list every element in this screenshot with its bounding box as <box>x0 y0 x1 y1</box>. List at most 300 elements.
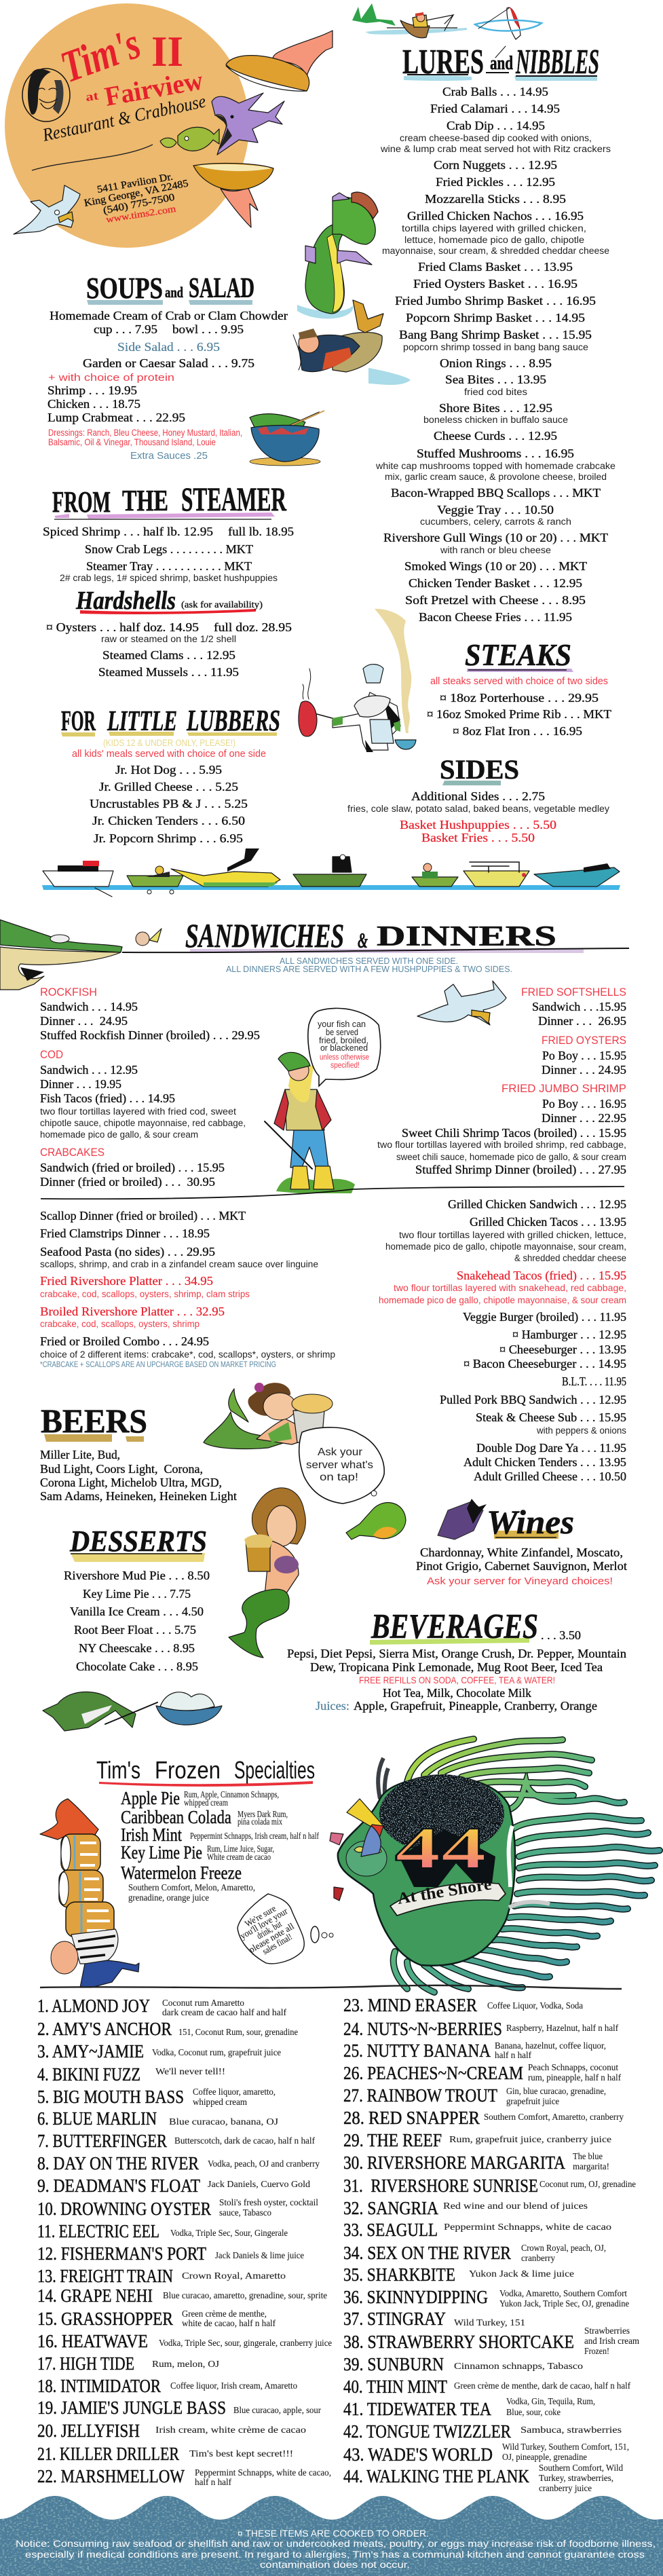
illustration: bearded fisherman <box>265 1052 355 1193</box>
panel: frozen specialties: whipped cream <box>184 1797 228 1808</box>
panel: soups and salad items: Chicken . . . 18.75 <box>48 397 140 411</box>
logo wordmark: Restaurant & Crabhouse <box>40 91 208 145</box>
panel: lures and nibbles items: Onion Rings . . . 8.95 <box>440 356 552 370</box>
heading: Beverages: . . . 3.50 <box>541 1628 581 1642</box>
callout: fish cooking bubble: be served <box>326 1028 358 1037</box>
panel: drink list right column: 43. WADE'S WORLD <box>343 2444 493 2465</box>
panel: drink list left column: Stoli's fresh oyster, cocktail <box>219 2197 318 2207</box>
panel: drink list right column: half n half <box>495 2050 531 2060</box>
callout: fish cooking bubble: or blackened <box>320 1043 368 1053</box>
address text <box>83 172 189 225</box>
heading: For Little Lubbers: LITTLE <box>107 706 177 737</box>
panel: desserts list <box>64 1569 210 1673</box>
panel: frozen specialties: Apple Pie <box>121 1788 180 1808</box>
panel: left seafood platters: crabcake, cod, scallops, oysters, shrimp <box>40 1319 200 1329</box>
icon: grapes <box>438 1499 487 1539</box>
address text: (540) 775-7500 <box>102 192 176 217</box>
icon: crown <box>347 1799 383 1826</box>
panel: frozen specialties: grenadine, orange juice <box>128 1892 209 1903</box>
panel: right sandwiches and tacos: Grilled Chicken Sandwich . . . 12.95 <box>448 1197 626 1211</box>
panel: steamer items <box>43 525 294 583</box>
panel: drink list left column: Jack Daniels & lime juice <box>215 2250 304 2260</box>
icon: dragon head <box>338 1777 515 1966</box>
panel: soups and salad items: Balsamic, Oil & Vinegar, Thousand Island, Louie <box>48 437 216 447</box>
panel: left fish dinners: CRABCAKES <box>40 1146 105 1159</box>
panel: right sandwiches and tacos: Snakehead Tacos (fried) . . . 15.95 <box>457 1269 626 1283</box>
panel: soups and salad items: Lump Crabmeat . . . 22.95 <box>48 411 185 424</box>
panel: steamer items: full lb. 18.95 <box>228 525 294 538</box>
panel: right fried dinners: Po Boy . . . 15.95 <box>542 1049 626 1062</box>
panel: left seafood platters: Broiled Rivershore Platter . . . 32.95 <box>40 1305 225 1318</box>
panel: drink list right column: Sambuca, strawberries <box>520 2425 622 2435</box>
panel: lures and nibbles items: fried cod bites <box>464 387 527 397</box>
panel: lures and nibbles items: Chicken Tender Basket . . . 12.95 <box>409 576 582 590</box>
panel: lures and nibbles items: mayonnaise, sour cream, & shredded cheddar cheese <box>382 246 609 256</box>
illustration: reclining mermaid with mug <box>204 1383 333 1449</box>
icon: hand and bottom bun <box>193 164 273 227</box>
heading: Sandwiches and Dinners: DINNERS <box>377 921 556 952</box>
panel: drink list right column: Green crème de menthe, dark de cacao, half n half <box>454 2381 630 2391</box>
panel: left seafood platters: *CRABCAKE + SCALLOPS ARE AN UPCHARGE BASED ON MARKET PRICING <box>40 1360 276 1369</box>
panel: frozen specialties: White cream de cacao <box>207 1852 271 1862</box>
panel: left fish dinners: homemade pico de gallo, & sour cream <box>40 1130 198 1140</box>
icon: fly with face <box>136 929 162 946</box>
panel: frozen specialties: pina colada mix <box>238 1816 282 1827</box>
heading: Hardshells: Hardshells <box>75 586 176 615</box>
address text: www.tims2.com <box>105 204 176 225</box>
panel: drink list left column: Jack Daniels, Cuervo Gold <box>208 2179 310 2189</box>
panel: right sandwiches and tacos: & shredded cheddar cheese <box>514 1253 626 1263</box>
panel: drink list right column: 32. SANGRIA <box>343 2198 438 2218</box>
panel: soups and salad items: Garden or Caesar Salad . . . 9.75 <box>83 356 254 370</box>
heading: Sides: SIDES <box>440 754 519 785</box>
panel: right sandwiches and tacos: Double Dog Dare Ya . . . 11.95 <box>476 1441 626 1455</box>
panel: left fish dinners: Dinner . . . 24.95 <box>40 1014 128 1028</box>
panel: right fried dinners: Dinner . . . 22.95 <box>542 1111 626 1125</box>
panel: right sandwiches and tacos: Grilled Chicken Tacos . . . 13.95 <box>470 1215 626 1229</box>
callout: sales final bubble: please note all <box>247 1921 296 1955</box>
heading: Wines: Wines <box>487 1503 574 1541</box>
panel: frozen specialties: Southern Comfort, Melon, Amaretto, <box>128 1882 255 1892</box>
panel: drink list right column: Blue, sour, coke <box>506 2407 561 2417</box>
heading: Lures and Nibbles <box>402 43 599 81</box>
panel: drink list right column: cranberry <box>521 2253 555 2263</box>
panel: beers list <box>40 1448 237 1503</box>
panel: sides items: fries, cole slaw, potato salad, baked beans, vegetable medley <box>347 804 609 814</box>
panel: lures and nibbles items: Bang Bang Shrimp Basket . . . 15.95 <box>399 328 592 341</box>
panel: drink list left column: Vodka, Triple Sec, Sour, Gingerale <box>170 2228 288 2238</box>
panel: steak items: ¤ 8oz Flat Iron . . . 16.95 <box>453 724 582 738</box>
panel: drink list right column: Yukon Jack & lime juice <box>469 2269 574 2279</box>
panel: lures and nibbles items: Fried Clams Basket . . . 13.95 <box>418 260 573 274</box>
panel: drink list right column: Yukon Jack, Triple Sec, OJ, grenadine <box>499 2298 629 2309</box>
callout: fish cooking bubble: unless otherwise <box>320 1053 369 1062</box>
panel: little lubbers items: Jr. Chicken Tenders . . . 6.50 <box>92 814 245 827</box>
panel: little lubbers items: Jr. Hot Dog . . . 5.95 <box>115 763 222 777</box>
panel: lures and nibbles items: Corn Nuggets . . . 12.95 <box>434 158 557 172</box>
panel: lures and nibbles items: Fried Calamari . . . 14.95 <box>430 102 560 115</box>
panel: left fish dinners: Stuffed Rockfish Dinner (broiled) . . . 29.95 <box>40 1028 260 1043</box>
panel: drink list right column: 44. WALKING THE PLANK <box>343 2466 529 2486</box>
panel: drink list right column: and Irish cream <box>584 2336 639 2346</box>
panel: right fried dinners: Stuffed Shrimp Dinner (broiled) . . . 27.95 <box>415 1163 626 1177</box>
panel: lures and nibbles items: Mozzarella Sticks . . . 8.95 <box>425 192 566 206</box>
panel: lures and nibbles items: white cap mushrooms topped with homemade crabcake <box>375 461 615 471</box>
illustration: boat and bobber top <box>352 3 542 58</box>
panel: lures and nibbles items: Soft Pretzel with Cheese . . . 8.95 <box>405 593 586 607</box>
panel: drink list left column: 1. ALMOND JOY <box>37 1996 150 2016</box>
panel: lures and nibbles items: Bacon-Wrapped BBQ Scallops . . . MKT <box>391 486 601 500</box>
panel: drink list left column: Tim's best kept secret!!! <box>189 2448 293 2459</box>
panel: little lubbers items: Jr. Grilled Cheese . . . 5.25 <box>99 780 238 794</box>
panel: hardshells items: raw or steamed on the 1/2 shell <box>101 634 236 644</box>
panel: frozen specialties: Rum, Lime Juice, Sugar, <box>207 1844 274 1854</box>
panel: lures and nibbles items: popcorn shrimp tossed in bang bang sauce <box>403 342 588 352</box>
panel: right sandwiches and tacos: Steak & Cheese Sub . . . 15.95 <box>476 1411 626 1424</box>
panel: right sandwiches and tacos: Adult Grilled Cheese . . . 10.50 <box>474 1470 626 1483</box>
panel: right fried dinners: Dinner . . . 26.95 <box>538 1014 626 1028</box>
panel: soups and salad items: bowl . . . 9.95 <box>172 322 244 336</box>
panel: drink list right column: Crown Royal, peach, OJ, <box>521 2243 606 2253</box>
panel: drink list right column: Vodka, Amaretto, Southern Comfort <box>499 2288 627 2298</box>
panel: desserts list: Key Lime Pie . . . 7.75 <box>83 1587 191 1601</box>
panel: right sandwiches and tacos: with peppers & onions <box>536 1425 626 1436</box>
heading: Lures and Nibbles: and <box>490 53 513 74</box>
panel: drink list left column: 22. MARSHMELLOW <box>37 2466 185 2486</box>
panel: drink list left column: Blue curacao, amaretto, grenadine, sour, sprite <box>163 2290 327 2300</box>
logo wordmark: II <box>151 27 183 75</box>
panel: lures and nibbles items: Grilled Chicken Nachos . . . 16.95 <box>407 209 584 223</box>
panel: lures and nibbles items: mix, garlic cream sauce, & provolone cheese, broiled <box>385 472 607 482</box>
callout: sales final bubble: drink, but <box>254 1918 284 1941</box>
icon: dessert bowl <box>156 1706 222 1725</box>
panel: drink list left column: Blue curacao, apple, sour <box>233 2405 321 2415</box>
icon: speckled dome <box>379 1774 504 1849</box>
panel: steak items: ¤ 18oz Porterhouse . . . 29.95 <box>440 691 599 705</box>
panel: drink list right column: 25. NUTTY BANANA <box>343 2040 491 2061</box>
panel: frozen specialties: Rum, Apple, Cinnamon Schnapps, <box>184 1789 279 1799</box>
panel: drink list left column: 20. JELLYFISH <box>37 2421 140 2441</box>
panel: drink list right column: Turkey, strawberries, <box>539 2473 613 2483</box>
logo wordmark: Tim's <box>54 18 147 92</box>
panel: sides items: Additional Sides . . . 2.75 <box>411 789 545 803</box>
icon: yellow sport boat <box>171 848 280 886</box>
panel: lures and nibbles items: lettuce, homemade pico de gallo, chipotle <box>404 235 584 245</box>
text: allergy and food safety notice: especially if medical conditions are present. In regard to allergies, Tim's has a communal kitchen and cannot guarantee cross <box>25 2549 645 2560</box>
heading: Beers: BEERS <box>41 1402 147 1440</box>
panel: little lubbers items: all kids' meals served with choice of one side <box>72 749 266 760</box>
panel: beers list: Miller Lite, Bud, <box>40 1448 120 1461</box>
panel: drink list right column: 42. TONGUE TWIZZLER <box>343 2421 511 2442</box>
panel: beers list: Corona Light, Michelob Ultra, MGD, <box>40 1476 222 1489</box>
icon: crab <box>43 1692 136 1731</box>
panel: desserts list: NY Cheescake . . . 8.95 <box>79 1641 195 1655</box>
panel: right sandwiches and tacos: ¤ Bacon Cheeseburger . . . 14.95 <box>463 1357 626 1370</box>
heading: Sandwiches and Dinners <box>122 916 629 954</box>
icon: trees <box>352 3 396 26</box>
panel: lures and nibbles items: boneless chicken in buffalo sauce <box>423 415 568 425</box>
panel: lures and nibbles items: Bacon Cheese Fries . . . 11.95 <box>419 610 572 624</box>
panel: steamer items: Steamer Tray . . . . . . . . . . . MKT <box>86 559 252 573</box>
callout: sales final bubble: you'll love your <box>238 1905 290 1941</box>
icon: fisherman and dog in boat <box>293 300 383 372</box>
panel: left fish dinners: Dinner . . . 19.95 <box>40 1077 121 1091</box>
panel: drink list right column: OJ, pineapple, grenadine <box>502 2452 587 2462</box>
heading: Hardshells <box>75 586 263 615</box>
panel: lures and nibbles items: Smoked Wings (10 or 20) . . . MKT <box>404 559 587 574</box>
panel: drink list left column: Coffee liquor, Irish cream, Amaretto <box>170 2381 297 2391</box>
panel: drink list left column: Irish cream, white crème de cacao <box>155 2425 306 2435</box>
icon: fisherman in rowboat <box>400 12 453 38</box>
panel: lures and nibbles items: Stuffed Mushrooms . . . 16.95 <box>417 447 574 460</box>
panel: drink list left column: We'll never tell!! <box>155 2066 225 2076</box>
panel: drink list left column: white de cacao, half n half <box>182 2318 276 2328</box>
panel: sides items: Basket Hushpuppies . . . 5.50 <box>400 818 556 832</box>
panel: drink list right column: 39. SUNBURN <box>343 2354 444 2374</box>
panel: frozen specialties: Watermelon Freeze <box>121 1863 242 1883</box>
panel: drink list left column: 14. GRAPE NEHI <box>37 2285 153 2306</box>
panel: soups and salad items: Shrimp . . . 19.95 <box>48 384 137 397</box>
heading: Sandwiches and Dinners: SANDWICHES <box>185 916 344 954</box>
heading: Desserts: DESSERTS <box>69 1525 207 1558</box>
panel: drink list right column: Rum, grapefruit juice, cranberry juice <box>449 2134 611 2144</box>
panel: left seafood platters: choice of 2 different items: crabcake*, cod, scallops*, oysters, or shrimp <box>40 1349 335 1360</box>
panel: lures and nibbles items: Sea Bites . . . 13.95 <box>445 373 546 386</box>
panel: drink list right column: 37. STINGRAY <box>343 2309 446 2329</box>
panel: drink list right column: 23. MIND ERASER <box>343 1995 477 2015</box>
panel: right fried dinners: FRIED SOFTSHELLS <box>521 986 626 998</box>
panel: lures and nibbles items: cream cheese-based dip cooked with onions, <box>400 133 592 143</box>
callout: beer on tap bubble <box>299 1427 384 1504</box>
panel: right sandwiches and tacos: homemade pico de gallo, chipotle mayonnaise, sour cream, <box>385 1242 626 1252</box>
icon: steak on fork <box>299 669 347 736</box>
callout: beer on tap bubble: server what's <box>306 1459 373 1471</box>
panel: drink list left column: Coffee liquor, amaretto, <box>193 2087 276 2097</box>
panel: frozen specialties: Caribbean Colada <box>121 1807 231 1827</box>
panel: drink list right column: Red wine and our blend of juices <box>443 2201 588 2211</box>
illustration: row of boats <box>42 848 620 897</box>
panel: drink list right column: 33. SEAGULL <box>343 2220 438 2240</box>
panel: drink list right column: Southern Comfort, Wild <box>539 2463 623 2473</box>
banner: At the Shore <box>390 1875 506 1916</box>
panel: drink list left column: 16. HEATWAVE <box>37 2331 148 2351</box>
heading: For Little Lubbers: LUBBERS <box>186 704 280 737</box>
panel: right fried dinners: FRIED OYSTERS <box>542 1034 626 1047</box>
panel: drink list right column: 30. RIVERSHORE MARGARITA <box>343 2152 565 2173</box>
panel: little lubbers items: (KIDS 12 & UNDER ONLY, PLEASE!) <box>103 738 235 748</box>
icon: bobber <box>475 7 542 58</box>
panel: drink list right column: margarita! <box>573 2161 609 2171</box>
panel: soups and salad items: Side Salad . . . 6.95 <box>117 340 220 354</box>
heading: From the Steamer <box>52 480 287 519</box>
panel: hardshells items: Steamed Mussels . . . 11.95 <box>98 665 239 679</box>
callout: fish cooking bubble <box>308 1008 381 1086</box>
panel: drink list left column: 10. DROWNING OYSTER <box>37 2199 211 2219</box>
callout: beer on tap bubble: Ask your <box>318 1446 363 1458</box>
panel: drink list right column: Banana, hazelnut, coffee liquor, <box>495 2040 606 2051</box>
illustration: mermaid holding beer <box>229 1488 305 1658</box>
panel: sides items: Basket Fries . . . 5.50 <box>421 831 535 844</box>
panel: right fried dinners: two flour tortillas layered with broiled shrimp, red cabbage, <box>377 1140 626 1150</box>
panel: drink list right column: 27. RAINBOW TROUT <box>343 2085 497 2106</box>
callout: fish cooking bubble: specified! <box>330 1062 360 1070</box>
panel: drink list right column: Coconut rum, OJ, grenadine <box>539 2179 636 2189</box>
panel: drink list right column: 28. RED SNAPPER <box>343 2108 480 2128</box>
panel: beverages list: Pepsi, Diet Pepsi, Sierra Mist, Orange Crush, Dr. Pepper, Mountain <box>287 1647 626 1660</box>
panel: left fish dinners: Sandwich (fried or broiled) . . . 15.95 <box>40 1161 225 1175</box>
panel: drink list left column: 12. FISHERMAN'S PORT <box>37 2243 206 2264</box>
icon: eyes <box>354 1846 381 1853</box>
heading: For Little Lubbers <box>61 704 280 737</box>
heading: Beverages: BEVERAGES <box>371 1607 538 1646</box>
icon: white boat <box>43 861 113 897</box>
icon: hand and top bun <box>226 31 333 91</box>
logo wordmark: Fairview <box>102 64 205 112</box>
illustration: sailor carrying barrels with parrot <box>40 1799 139 1987</box>
panel: drink list right column: Vodka, Gin, Tequila, Rum, <box>506 2396 595 2406</box>
logo wordmark: at <box>85 89 99 104</box>
panel: drink list right column: 34. SEX ON THE RIVER <box>343 2243 511 2263</box>
heading: Soups and Salad: and <box>165 284 183 301</box>
panel: left fish dinners: Dinner (fried or broiled) . . . 30.95 <box>40 1175 215 1189</box>
panel: lures and nibbles items: Popcorn Shrimp Basket . . . 14.95 <box>406 311 585 324</box>
heading: Tim's Frozen Specialties <box>96 1756 315 1787</box>
panel: drink list left column: 17. HIGH TIDE <box>37 2353 134 2374</box>
panel: steamer items: Snow Crab Legs . . . . . . . . . MKT <box>85 542 253 556</box>
icon: green hull boat <box>293 855 366 886</box>
heading: Tim's Frozen Specialties: Tim's <box>96 1756 140 1784</box>
panel: steamer items: 2# crab legs, 1# spiced shrimp, basket hushpuppies <box>60 573 278 583</box>
heading: From the Steamer: THE <box>122 484 168 517</box>
panel: beverages list: Dew, Tropicana Pink Lemonade, Mug Root Beer, Iced Tea <box>310 1660 603 1674</box>
panel: drink list left column: 5. BIG MOUTH BASS <box>37 2087 184 2107</box>
panel: soups and salad items: Dressings: Ranch, Bleu Cheese, Honey Mustard, Italian, <box>48 428 242 438</box>
panel: left fish dinners: Fish Tacos (fried) . . . 14.95 <box>40 1091 175 1106</box>
panel: steak items <box>427 676 611 738</box>
panel: drink list left column: 15. GRASSHOPPER <box>37 2309 173 2329</box>
panel: frozen specialties: Peppermint Schnapps, Irish cream, half n half <box>190 1831 319 1841</box>
icon: cabin cruiser <box>463 862 529 886</box>
heading: Tim's Frozen Specialties: Specialties <box>234 1756 315 1784</box>
panel: drink list left column: Butterscotch, dark de cacao, half n half <box>174 2135 315 2146</box>
panel: drink list right column: Cinnamon schnapps, Tabasco <box>454 2361 583 2371</box>
panel: right fried dinners: Sandwich . . .15.95 <box>532 1000 626 1013</box>
icon: barrels <box>59 1834 114 1937</box>
panel: soups and salad items: + with choice of protein <box>48 372 174 384</box>
panel: beers list: Bud Light, Coors Light, Corona, <box>40 1462 203 1476</box>
panel: right sandwiches and tacos: ¤ Hamburger . . . 12.95 <box>512 1328 626 1341</box>
panel: drink list right column: Strawberries <box>584 2326 630 2336</box>
callout: beer on tap bubble: on tap! <box>320 1472 358 1483</box>
panel: beverages list: Apple, Grapefruit, Pineapple, Cranberry, Orange <box>354 1699 597 1713</box>
footer: blue wave with notice <box>0 2491 663 2576</box>
panel: drink list left column: Vodka, Coconut rum, grapefruit juice <box>152 2047 281 2057</box>
panel: drink list right column: Coffee Liquor, Vodka, Soda <box>487 2000 583 2011</box>
panel: drink list right column: Raspberry, Hazelnut, half n half <box>506 2023 618 2033</box>
panel: desserts list: Root Beer Float . . . 5.75 <box>74 1623 196 1637</box>
panel: drink list right column: 24. NUTS~N~BERRIES <box>343 2019 502 2039</box>
panel: drink list right column: Frozen! <box>584 2346 609 2356</box>
panel: steak items: ¤ 16oz Smoked Prime Rib . . . MKT <box>427 707 611 721</box>
panel: drink list left column: 6. BLUE MARLIN <box>37 2108 157 2129</box>
panel: wines list: Chardonnay, White Zinfandel, Moscato, <box>420 1546 623 1559</box>
panel: drink list left column: Vodka, peach, OJ and cranberry <box>208 2159 320 2169</box>
panel: left fish dinners <box>40 986 260 1189</box>
panel: left fish dinners: Sandwich . . . 14.95 <box>40 1000 138 1013</box>
panel: frozen specialties <box>121 1788 319 1903</box>
panel: drink list left column: 11. ELECTRIC EEL <box>37 2221 159 2241</box>
panel: drink list left column: 4. BIKINI FUZZ <box>37 2064 140 2085</box>
panel: left seafood platters: Fried Clamstrips Dinner . . . 18.95 <box>40 1227 210 1240</box>
icon: teal speedboat <box>534 863 620 886</box>
heading: Tim's Frozen Specialties: Frozen <box>155 1756 221 1784</box>
icon: parrot <box>40 1799 98 1840</box>
panel: drink list left column: sauce, Tabasco <box>219 2207 271 2218</box>
panel: little lubbers items: Jr. Popcorn Shrimp . . . 6.95 <box>94 832 243 845</box>
panel: drink list right column: Gin, blue curacao, grenadine, <box>506 2086 606 2096</box>
panel: left seafood platters: Seafood Pasta (no sides) . . . 29.95 <box>40 1245 215 1259</box>
panel: lures and nibbles items <box>375 85 615 624</box>
icon: green jon boat <box>127 866 183 894</box>
heading: From the Steamer: FROM <box>52 485 111 519</box>
panel: drink list left column: Coconut rum Amaretto <box>162 1998 244 2008</box>
panel: left fish dinners: Sandwich . . . 12.95 <box>40 1063 138 1077</box>
panel: drink list right column: 38. STRAWBERRY SHORTCAKE <box>343 2332 574 2352</box>
panel: drink list left column: Peppermint Schnapps, white de cacao, <box>195 2467 331 2478</box>
illustration: crab with dessert bowl <box>43 1692 222 1731</box>
panel: drink list right column: rum, pineapple, half n half <box>528 2072 621 2083</box>
panel: left seafood platters: scallops, shrimp, and crab in a zinfandel cream sauce over linguine <box>40 1259 318 1269</box>
callout: sales final bubble <box>234 1894 333 1964</box>
illustration: sea serpent with fisherman in boat <box>293 192 411 385</box>
address text: King George, VA 22485 <box>83 178 189 209</box>
panel: frozen specialties: Irish Mint <box>121 1825 182 1845</box>
panel: right sandwiches and tacos: two flour tortillas layered with snakehead, red cabbage, <box>394 1283 626 1293</box>
heading: Soups and Salad <box>86 272 254 305</box>
panel: beers list: Sam Adams, Heineken, Heineken Light <box>40 1489 237 1503</box>
illustration: alligator <box>0 920 122 990</box>
callout: fish cooking bubble: fried, broiled, <box>319 1036 368 1045</box>
panel: right sandwiches and tacos: two flour tortillas layered with grilled chicken, lettuce, <box>399 1230 626 1240</box>
heading: For Little Lubbers: FOR <box>61 706 96 737</box>
panel: lures and nibbles items: Crab Balls . . . 14.95 <box>442 85 548 98</box>
callout: fish cooking bubble: your fish can <box>318 1020 366 1029</box>
panel: lures and nibbles items: Veggie Tray . . . 10.50 <box>437 503 554 517</box>
panel: wines list: Ask your server for Vineyard choices! <box>427 1575 613 1587</box>
panel: soups and salad items: Homemade Cream of Crab or Clam Chowder <box>50 309 288 322</box>
icon: seagull right <box>417 981 506 1025</box>
panel: drink list left column: Crown Royal, Amaretto <box>182 2271 286 2281</box>
panel: hardshells items <box>46 620 292 679</box>
heading: Soups and Salad: SALAD <box>189 273 254 304</box>
panel: drink list right column: 41. TIDEWATER TEA <box>343 2399 491 2419</box>
panel: right fried dinners <box>377 986 626 1177</box>
panel: left seafood platters: crabcake, cod, scallops, oysters, shrimp, clam strips <box>40 1289 250 1299</box>
panel: drink list left column: Rum, melon, OJ <box>152 2359 219 2369</box>
panel: sides items <box>347 789 609 844</box>
panel: drink list right column: grapefruit juice <box>506 2096 559 2106</box>
panel: soups and salad items <box>48 309 288 462</box>
panel: drink list left column: 8. DAY ON THE RIVER <box>37 2153 199 2173</box>
panel: drink list right column: 35. SHARKBITE <box>343 2264 455 2285</box>
panel: drink list left column: 21. KILLER DRILLER <box>37 2444 179 2464</box>
panel: drink list left column: 2. AMY'S ANCHOR <box>37 2019 172 2039</box>
panel: right sandwiches and tacos: Adult Chicken Tenders . . . 13.95 <box>463 1455 626 1469</box>
text: 44: 44 <box>395 1816 487 1882</box>
panel: drink list left column: 19. JAMIE'S JUNGLE BASS <box>37 2397 226 2418</box>
panel: drink list right column: Peach Schnapps, coconut <box>528 2062 618 2072</box>
heading: Hardshells: (ask for availability) <box>181 600 263 610</box>
